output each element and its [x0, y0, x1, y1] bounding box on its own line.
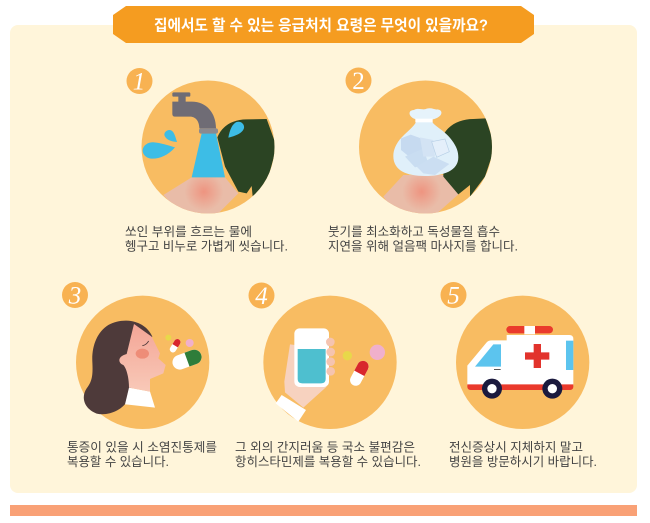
cheek: [136, 349, 149, 359]
step 5 text: 병원을 방문하시기 바랍니다.: [449, 455, 597, 469]
step 1 number badge: [126, 68, 152, 96]
fingers: [326, 338, 335, 346]
step 5 illustration: ambulance: [456, 296, 589, 429]
step 2 text: 붓기를 최소화하고 독성물질 흡수: [328, 225, 500, 239]
small capsule: [169, 338, 182, 354]
skin with burn: [164, 177, 238, 214]
cuff: [276, 395, 306, 422]
step 5 text: [449, 440, 597, 469]
step 2 number badge: [346, 68, 372, 95]
step 3 text: 통증이 있을 시 소염진통제를: [67, 440, 217, 454]
body: [467, 335, 573, 386]
step 4 text: [235, 440, 421, 469]
step 4 text: 그 외의 간지러움 등 국소 불편감은: [235, 440, 415, 454]
eye: [142, 341, 149, 346]
step 5 number badge: 5: [447, 282, 460, 310]
siren: [506, 326, 553, 333]
cross: [525, 344, 549, 368]
step 5 number badge: [440, 282, 466, 310]
dots: [343, 351, 352, 360]
step 3 number badge: [62, 282, 88, 310]
bottom bar: [10, 505, 637, 516]
liquid: [298, 349, 326, 383]
front window: [475, 344, 501, 367]
bag: [393, 122, 458, 176]
door handle: [494, 369, 501, 370]
rear window: [566, 341, 573, 370]
step 4 text: 항히스타민제를 복용할 수 있습니다.: [235, 455, 421, 469]
hair: [84, 321, 152, 414]
shirt: [125, 388, 155, 408]
ice cubes: [401, 134, 422, 156]
step 4 number badge: 4: [255, 283, 268, 310]
water drops: [143, 142, 175, 159]
step 2 illustration: ice pack: [359, 80, 495, 220]
step 1 text: [125, 225, 288, 254]
step 3 illustration: woman taking pills: [76, 296, 209, 429]
skin with burn: [383, 175, 458, 214]
step 3 number badge: 3: [68, 282, 81, 310]
step 3 text: [67, 440, 217, 469]
hair: [217, 119, 277, 197]
stripe: [467, 384, 573, 390]
step 4 illustration: medicine in hand: [263, 296, 397, 429]
water stream: [192, 133, 225, 177]
step 1 number badge: 1: [133, 68, 145, 96]
title banner: 집에서도 할 수 있는 응급처치 요령은 무엇이 있을까요?: [154, 16, 488, 34]
step 1 text: 쏘인 부위를 흐르는 물에: [125, 225, 252, 239]
step 2 text: 지연을 위해 얼음팩 마사지를 합니다.: [328, 240, 518, 254]
dots: [165, 335, 171, 341]
face: [119, 324, 166, 392]
step 2 number badge: 2: [352, 68, 365, 95]
step 5 text: 전신증상시 지체하지 말고: [449, 440, 583, 454]
hair: [443, 118, 495, 197]
cup: [294, 328, 329, 387]
step 2 text: [328, 225, 518, 254]
step 1 illustration: faucet: [142, 80, 277, 220]
step 4 number badge: [248, 282, 274, 310]
faucet: [172, 102, 216, 128]
title banner: [113, 6, 534, 43]
hand: [284, 344, 327, 408]
step 1 text: 헹구고 비누로 가볍게 씻습니다.: [125, 240, 288, 254]
step 3 text: 복용할 수 있습니다.: [67, 455, 169, 469]
big capsule: [170, 348, 204, 372]
capsule: [348, 359, 371, 388]
wheels: [482, 379, 502, 399]
